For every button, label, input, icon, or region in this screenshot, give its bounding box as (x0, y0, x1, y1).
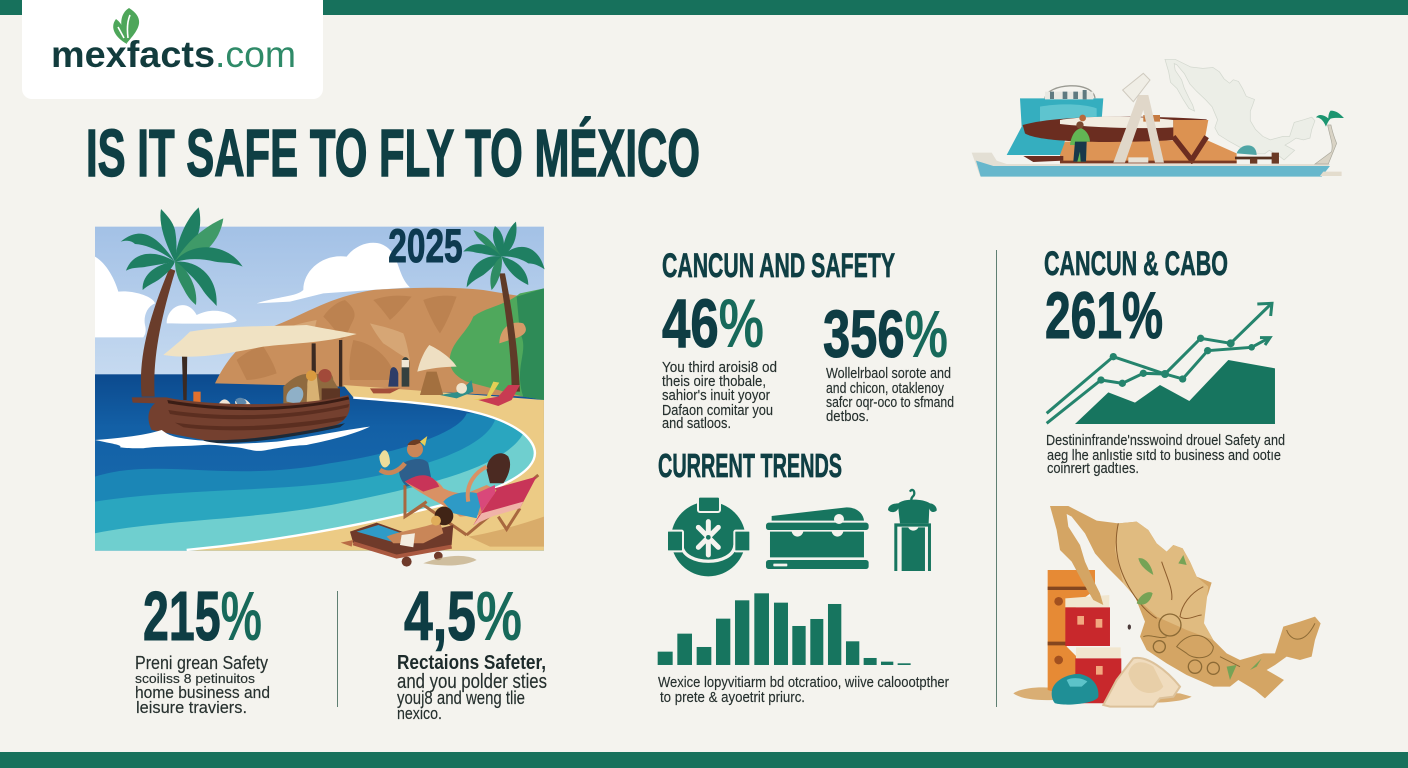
stat: 46%: Dafaon comitar you (662, 402, 773, 419)
stat: 4,5%: 4,5% (404, 577, 522, 655)
trend chart with arrows (1047, 303, 1275, 424)
bottom green bar (0, 752, 1408, 768)
Cancun & Cabo caption: coinrert gadtıes. (1047, 460, 1139, 477)
illustration: Mexico map and luggage (1013, 506, 1321, 707)
title: IS IT SAFE TO FLY TO MÉXICO (86, 116, 700, 191)
stat: 46%: and satloos. (662, 415, 731, 432)
stat: 46%: 46% (662, 285, 764, 362)
logo: mexfacts.com (22, 0, 323, 99)
stat: 4,5%: and you polder sties (397, 671, 547, 693)
trends caption: Wexice lopyvitiarm bd otcratioo, wiive caloootpther (658, 674, 949, 691)
icon: compass badge (667, 497, 750, 576)
top green bar (0, 0, 1408, 15)
Cancun & Cabo caption (1046, 432, 1285, 477)
stat: 215%: 215% (143, 577, 262, 655)
boat (132, 325, 357, 443)
beach scene illustration (95, 207, 545, 567)
sea (95, 374, 544, 551)
stat: 356%: and chicon, otaklenoy (826, 380, 944, 397)
divider (996, 250, 997, 707)
clouds (95, 243, 410, 337)
stat: 215% (135, 577, 270, 717)
stat: 215%: leisure traviers. (136, 698, 247, 717)
stat: 356%: 356% (823, 297, 948, 372)
bar chart (658, 593, 911, 665)
icon: garment on hanger (888, 490, 937, 571)
trends caption: to prete & ayoetrit priurc. (660, 689, 805, 706)
stat: 215%: Preni grean Safety (135, 653, 268, 673)
beach visitors near umbrella (370, 345, 520, 406)
sunbathers and loungers (341, 436, 544, 567)
stat: 4,5%: nexico. (397, 704, 442, 723)
stat: 215%: home business and (135, 683, 270, 702)
divider (337, 591, 338, 707)
left palm (121, 207, 243, 397)
map of Mexico (1050, 506, 1321, 698)
Cancun & Cabo caption: aeg lhe anlıstie sıtd to business and ootıe (1047, 447, 1281, 464)
logo: mexfacts.com: .com (215, 34, 296, 75)
right palm (463, 222, 545, 392)
stat: 356%: detbos. (826, 408, 869, 425)
sand (187, 385, 544, 551)
stat: 356%: Wollelrbaol sorote and (826, 365, 951, 382)
illustration: boat and pale map (972, 59, 1344, 177)
stat: 261%: 261% (1045, 278, 1163, 352)
heading: Current Trends: CURRENT TRENDS (658, 447, 842, 484)
year label: 2025 (388, 219, 463, 272)
trend icons (667, 490, 937, 576)
stat: 46% (662, 285, 777, 432)
stat: 46%: You third aroisi8 od (662, 359, 777, 376)
cliff (215, 288, 523, 397)
heading: Cancun and Safety: CANCUN AND SAFETY (662, 247, 895, 285)
icon: case (766, 507, 869, 569)
shoreline foam (187, 398, 535, 550)
boat wake (95, 427, 370, 451)
stat: 4,5% (397, 577, 547, 723)
Cancun & Cabo caption: Destininfrande'nsswoind drouel Safety and (1046, 432, 1285, 449)
stat: 215%: scoiliss 8 petinuitos (135, 671, 256, 686)
stat: 356%: safcr oqr-oco to sfmand (826, 394, 954, 411)
logo: mexfacts.com: mexfacts (51, 34, 215, 75)
sky (95, 227, 544, 377)
stat: 356% (823, 297, 954, 425)
greenery (450, 288, 544, 400)
stat: 46%: sahior's inuit yoyor (662, 387, 770, 404)
stat: 4,5%: youj8 and weng tlie (397, 688, 525, 708)
heading: Cancun & Cabo: CANCUN & CABO (1044, 245, 1228, 283)
stat: 4,5%: Rectaions Safeter, (397, 652, 546, 674)
trends caption (658, 674, 949, 706)
stat: 46%: theis oire thobale, (662, 373, 766, 390)
